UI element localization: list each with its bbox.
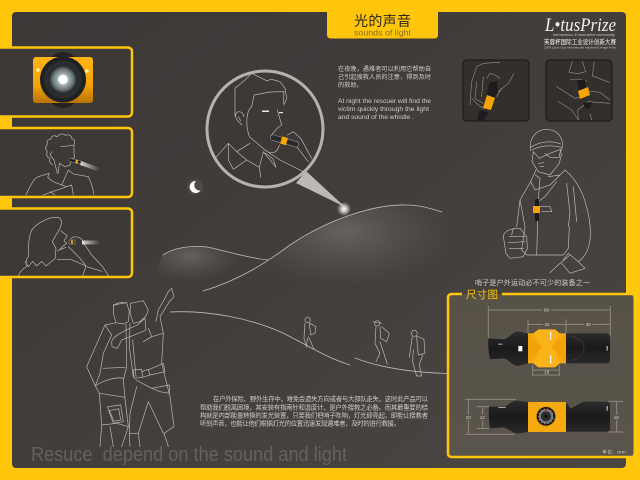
whistle beam [80,161,100,172]
eyes [262,110,283,113]
whistle on chest [533,199,540,221]
logo wordmark: L•tusPrize [544,15,616,36]
magnifier ring [207,71,323,187]
heading: 尺寸图 [466,288,498,301]
thumbnail: whistle at mouth [546,60,612,121]
icon: whistle front view [33,52,93,108]
whistle [477,81,498,121]
whistle beam [82,240,100,244]
hiker three [409,330,425,376]
dimension labels: 80 [544,308,550,313]
logo small line: 2008 Lotus Cup International Industrial Design Prize [544,46,616,50]
text block: outdoor use: 在户外探险、野外生存中，难免会遗失方向或者与大部队走失，这时此产品可以 [213,394,429,403]
magnifier: face close up [207,71,345,207]
dimension labels: 20 [466,415,471,420]
line art: hand [470,62,514,108]
line art: face and fingers [557,61,610,120]
dimension labels: 25 [544,322,550,327]
left panel: woman blowing whistle [0,208,132,277]
thumbnail: whistle in hand [463,60,529,121]
whistle [577,80,592,109]
line art: man [26,134,94,195]
logo: Lotus Prize [544,15,616,50]
dimension labels: 单位: mm [602,448,626,455]
whistle top view [488,329,610,367]
whistle [270,133,300,148]
title tab [327,12,438,38]
line art: woman [18,217,109,276]
dimension labels: 18 [544,370,550,375]
hill glow: large hill [282,206,420,270]
glowing light point [337,202,351,216]
whistle [69,158,81,164]
illustration: rescuer with whistle on chest [503,129,590,273]
text block: english night rescue [338,98,432,121]
hiker two [373,321,389,364]
text block: chinese night rescue: 在夜晚，遇难者可以利用它帮助自 [338,65,431,73]
illustration: hikers on the ridge [304,317,425,376]
dimension labels [465,307,626,455]
magnifier pointer [296,171,345,207]
hill glow: small hill [158,246,225,274]
moon icon [187,179,203,195]
text block: chinese night rescue: 的救助。 [338,81,363,89]
logo tagline: harmonious & innovative community [553,33,615,37]
left panel: man blowing whistle [0,128,132,197]
whistle [69,240,75,244]
text block: outdoor use: 帮助我们脱离困境，其安装有指南针和温度计，是户外搜救之必备。而其最重要的结 [200,402,429,411]
text block: outdoor use: 构就是内部能量转换的发光装置，只要我们把哨子吹响，灯光即亮起，即能让搜救者 [200,410,429,420]
dimension labels: 18 [614,415,619,420]
dimension lines [465,306,623,434]
left panel: whistle lens icon [0,48,132,116]
text block: chinese night rescue [338,65,431,89]
dimension labels: 30 [586,322,591,327]
panel: dimensions [448,288,634,457]
text block: outdoor use [200,394,429,428]
line art: man close up [216,73,312,177]
slogan: Resuce depend on the sound and light [31,444,347,466]
illustration: two hikers pointing [87,288,174,447]
text block: english night rescue: and sound of the whistle . [338,114,414,121]
logo chinese: 芙蓉杯国际工业设计创新大赛 [544,37,616,46]
title english: sounds of light [354,28,412,38]
text block: chinese night rescue: 己引起搜救人员的注意，得到及时 [338,73,431,81]
whistle side view [489,401,610,433]
hiker one [304,317,316,349]
hills lines [163,205,447,374]
dimension labels: 12 [480,415,485,420]
text block: english night rescue: At night the rescuer will find the [338,98,432,105]
caption: 哨子是户外运动必不可少的装备之一 [475,278,590,287]
text block: outdoor use: 听到声音，也能让他们根据灯光的位置迅速发现遇难者，及时的进行救援。 [200,419,400,428]
title chinese: 光的声音 [354,13,411,29]
text block: english night rescue: victim quickly through the light [338,106,429,113]
